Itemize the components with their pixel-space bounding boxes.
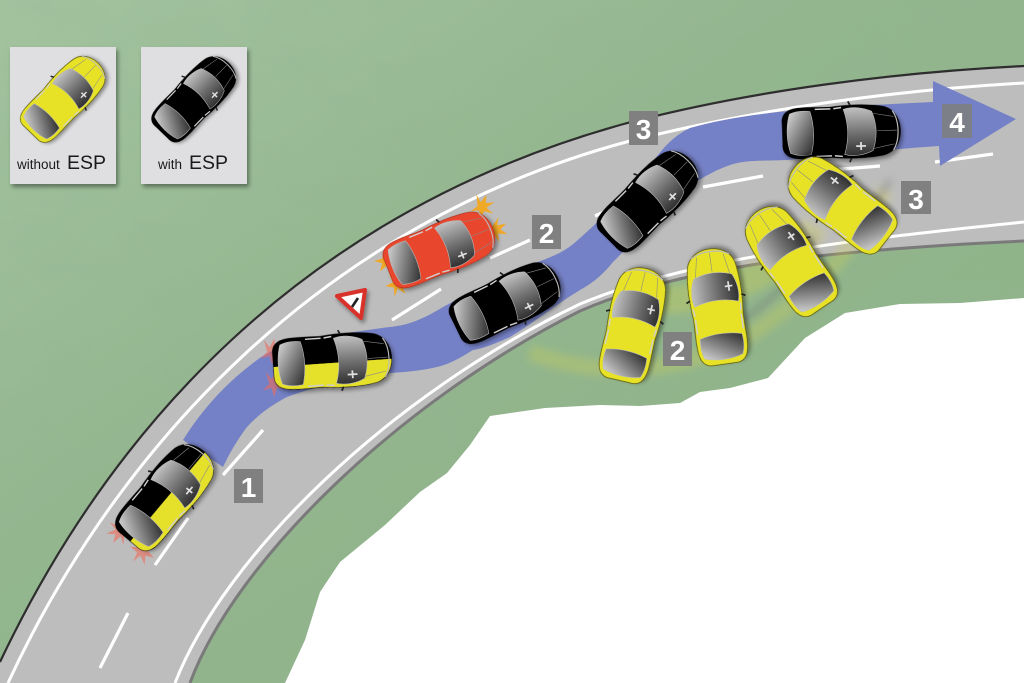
- skid tracks off the road: [530, 180, 890, 369]
- legend: with ESP: [141, 46, 247, 184]
- legend: without ESP: [10, 46, 116, 184]
- red obstacle car with hazard lights: [371, 193, 512, 298]
- black car: position 3 with ESP: [588, 138, 711, 261]
- yellow car: skidding, on the lane: [776, 144, 905, 264]
- step badge 3 with ESP: 3: [636, 114, 651, 145]
- step badge 2 with ESP: 2: [539, 218, 554, 249]
- step badge 4: 4: [949, 107, 965, 138]
- step badge 2 without ESP: [663, 332, 692, 366]
- legend label: without ESP: without: [16, 157, 60, 172]
- step badge 4: [942, 104, 972, 138]
- black car: position 4 with ESP: [781, 100, 902, 164]
- legend label: without ESP: ESP: [67, 152, 106, 174]
- legend icon: black car: [144, 46, 247, 150]
- car 2: yellow and black, braking: [261, 327, 394, 397]
- legend label: with ESP: with: [157, 157, 182, 172]
- step badge 2 with ESP: [532, 215, 561, 249]
- step badge 1: 1: [241, 472, 256, 503]
- step badge 2 without ESP: 2: [670, 335, 685, 366]
- black car: position 2 with ESP: [442, 251, 570, 353]
- warning triangle sign: [337, 290, 365, 318]
- step badge 3 without ESP: 3: [908, 184, 924, 215]
- blue ESP trajectory arrow: [183, 81, 1016, 467]
- yellow car: skidding, crossing the road edge: [679, 245, 755, 368]
- car 1: yellow and black, start of manoeuvre: [106, 442, 220, 564]
- yellow car: skidding, front on grass: [591, 262, 675, 387]
- legend icon: yellow car: [13, 46, 116, 150]
- legend label: with ESP: ESP: [189, 152, 228, 174]
- step badge 1: [234, 469, 263, 503]
- step badge 3 without ESP: [901, 181, 931, 215]
- step badge 3 with ESP: [629, 111, 658, 145]
- blank white area lower right: [285, 298, 1024, 683]
- yellow car: skidding, spinning: [733, 195, 847, 324]
- lane centre dashes: [100, 154, 993, 668]
